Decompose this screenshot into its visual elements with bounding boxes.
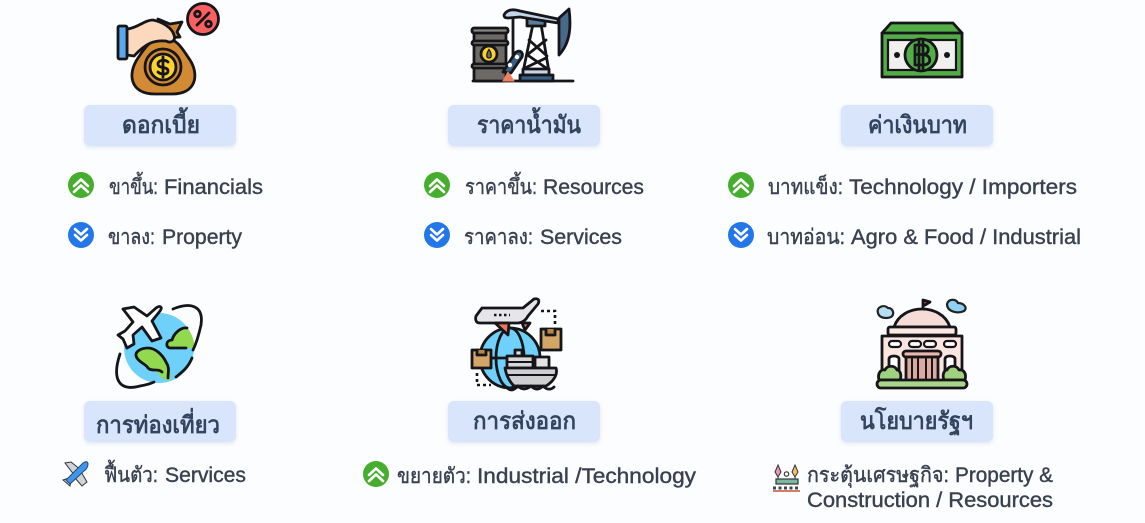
item: baht weak: Agro & Food / Industrial [851, 226, 1081, 249]
item: rates up: Financials [164, 176, 263, 199]
heading pill: การส่งออก: การส่งออก [473, 408, 576, 435]
heading pill: การส่งออก [448, 401, 600, 442]
item: export expansion [363, 461, 697, 488]
item: baht strong [728, 172, 1077, 199]
panel: oil price [424, 9, 644, 249]
item: stimulus [773, 464, 1053, 512]
item: stimulus: Construction / Resources [807, 489, 1053, 512]
icon: oil barrel and pump jack [472, 9, 573, 81]
panel: baht [728, 23, 1081, 249]
item: baht weak: บาทอ่อน: [767, 226, 845, 249]
icon: global trade [472, 299, 561, 390]
item: oil down [424, 222, 622, 249]
heading pill: ดอกเบี้ย: ดอกเบี้ย [122, 106, 200, 139]
item: baht strong: บาทแข็ง: [768, 173, 843, 199]
heading pill: ค่าเงินบาท [841, 105, 993, 146]
heading pill: ดอกเบี้ย [84, 105, 236, 146]
item: rates down: ขาลง: [108, 226, 155, 249]
heading pill: ราคาน้ำมัน: ราคาน้ำมัน [477, 106, 582, 139]
item: baht strong: Technology / Importers [849, 176, 1077, 199]
item: stimulus: Property & [955, 464, 1053, 487]
item: rates up: ขาขึ้น: [109, 172, 158, 199]
item: export expansion: ขยายตัว: [397, 465, 471, 488]
icon: globe and plane [117, 306, 201, 387]
item: rates down [68, 222, 242, 249]
heading pill: ราคาน้ำมัน [448, 105, 600, 146]
heading pill: การท่องเที่ยว: การท่องเที่ยว [96, 407, 220, 439]
item: rates up [68, 172, 263, 199]
heading pill: การท่องเที่ยว [84, 401, 236, 442]
icon: baht banknote [882, 23, 962, 77]
item: oil up [424, 172, 644, 199]
item: oil down: Services [540, 226, 622, 249]
icon: money bag with percent [118, 4, 218, 94]
item: rates down: Property [162, 226, 242, 249]
item: tourism recovery: Services [165, 464, 246, 487]
heading pill: นโยบายรัฐฯ [841, 401, 993, 442]
item: stimulus: กระตุ้นเศรษฐกิจ: [807, 464, 949, 488]
icon: small airplane [63, 462, 88, 486]
panel: exports [363, 299, 697, 488]
item: oil up: Resources [543, 176, 644, 199]
panel: government policy [773, 300, 1053, 512]
heading pill: ค่าเงินบาท: ค่าเงินบาท [868, 112, 967, 139]
icon: small meeting [773, 465, 800, 491]
icon: government building [877, 300, 967, 388]
item: export expansion: Industrial /Technology [477, 465, 697, 488]
item: oil up: ราคาขึ้น: [465, 172, 537, 199]
item: baht weak [728, 222, 1081, 249]
panel: tourism [63, 306, 246, 487]
panel: interest rate [68, 4, 263, 249]
heading pill: นโยบายรัฐฯ: นโยบายรัฐฯ [860, 406, 973, 437]
item: tourism recovery [63, 460, 246, 487]
item: oil down: ราคาลง: [464, 226, 533, 249]
item: tourism recovery: ฟื้นตัว: [104, 460, 158, 487]
